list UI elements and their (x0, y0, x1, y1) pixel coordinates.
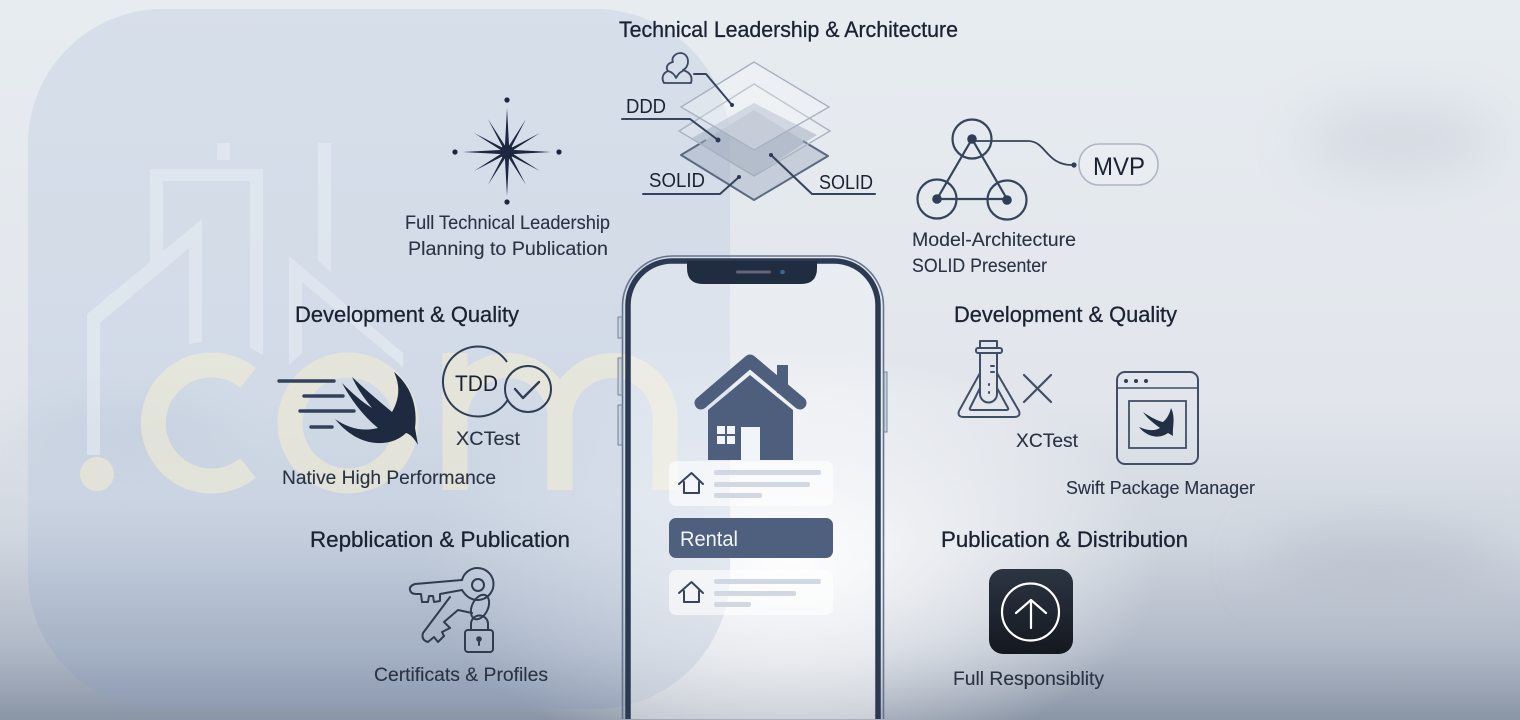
text: model architecture (912, 230, 1076, 277)
icon: test flask and cross (959, 341, 1051, 417)
label: certificates and profiles: Certificats & Profiles (374, 665, 548, 686)
label: swift package manager: Swift Package Manager (1066, 478, 1255, 498)
icon: model architecture network (918, 120, 1158, 220)
label: native high performance: Native High Performance (282, 468, 496, 489)
card: listing one (669, 461, 833, 506)
label: full responsibility: Full Responsiblity (953, 669, 1104, 690)
label: XCTest right: XCTest (1016, 431, 1079, 452)
phone side buttons (618, 317, 887, 445)
badge: MVP (1079, 144, 1158, 185)
card: listing two (669, 570, 833, 615)
arrow: DDD leader (622, 119, 718, 140)
heading: technical leadership: Technical Leadership & Architecture (619, 17, 958, 42)
text: full technical leadership (405, 213, 610, 260)
label: SOLID left: SOLID (649, 170, 705, 192)
icon: keys and padlock (410, 568, 493, 652)
phone mockup (618, 256, 887, 719)
watermark: rounded app tile (28, 9, 730, 709)
icon: swift package manager window (1117, 372, 1198, 464)
watermark: .com lettering (80, 353, 665, 491)
label: XCTest left: XCTest (456, 429, 521, 450)
icon: house (701, 361, 800, 460)
icon: leadership star (452, 97, 562, 205)
text: model architecture: Model-Architecture (912, 230, 1076, 251)
text: full technical leadership: Full Technical Leadership (405, 213, 610, 234)
heading: development and quality right: Development & Quality (954, 302, 1177, 327)
label: DDD: DDD (626, 96, 666, 118)
icon: upload app tile (989, 569, 1073, 654)
badge: MVP: MVP (1093, 153, 1145, 181)
icon: swift bird with speed lines (279, 372, 418, 445)
icon: people (663, 53, 692, 83)
button: rental (669, 518, 833, 558)
heading: publication and distribution: Publication & Distribution (941, 527, 1188, 552)
text: model architecture: SOLID Presenter (912, 256, 1048, 277)
icon: TDD check badge (443, 347, 551, 417)
watermark: house outline logo (87, 143, 403, 455)
arrow: to top layer (694, 74, 732, 105)
arrow: left SOLID leader (643, 177, 739, 194)
arrow: right SOLID leader (771, 155, 875, 194)
label: SOLID right: SOLID (819, 172, 873, 194)
heading: development and quality left: Development & Quality (295, 302, 519, 327)
button: rental: Rental (680, 528, 738, 551)
icon: TDD check badge: TDD (455, 371, 498, 396)
text: full technical leadership: Planning to Publication (408, 239, 608, 260)
heading: replication and publication: Repblication & Publication (310, 527, 570, 552)
icon: layered architecture diagram (622, 53, 875, 200)
phone notch (687, 261, 817, 284)
